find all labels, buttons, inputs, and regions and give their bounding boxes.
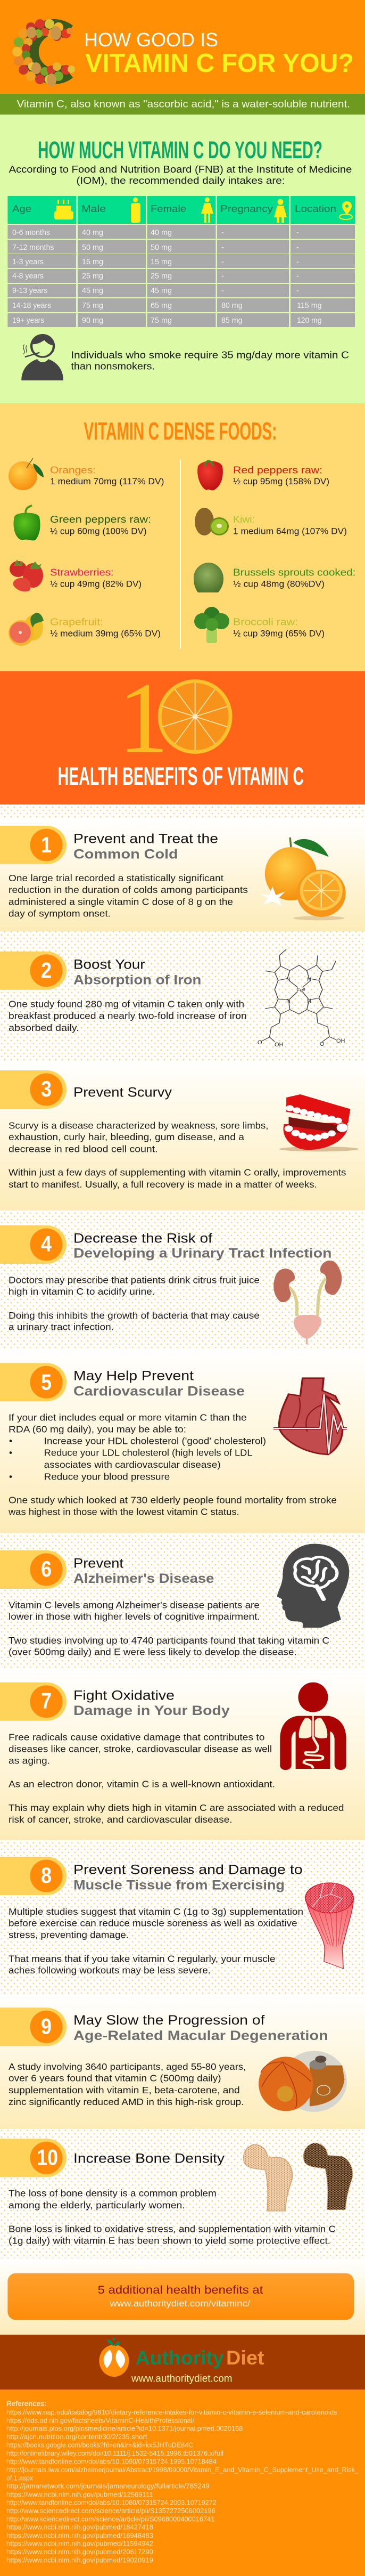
- food: green peppers: ½ cup 60mg (100% DV): [50, 526, 147, 536]
- icon: head with brain: [277, 1544, 349, 1628]
- icon: fruit letter C: [12, 19, 75, 86]
- number badge 8: 8: [41, 1863, 52, 1888]
- icon: red pepper: [197, 461, 223, 490]
- icon: smoker: [21, 335, 63, 380]
- benefit text: stress, preventing damage.: [9, 1930, 129, 1940]
- reference list: https://ods.od.nih.gov/factsheets/VitaminC-HealthProfessional/: [6, 2417, 195, 2424]
- benefit text: (over 500mg daily) and E were less likely to develop the disease.: [9, 1647, 297, 1657]
- panel: benefit 4: [0, 1210, 365, 1348]
- reference list: https://www.ncbi.nlm.nih.gov/pubmed/18427418: [6, 2524, 153, 2531]
- icon: strawberries: [10, 559, 43, 591]
- intake table: [7, 196, 355, 327]
- panel: benefit 6: [0, 1533, 365, 1669]
- row: 14-18 years: 65 mg: [151, 301, 172, 310]
- benefit title: Increase Bone Density: [73, 2151, 225, 2166]
- food: grapefruit: Grapefruit:: [50, 616, 103, 627]
- number badge 9: 9: [41, 2013, 52, 2038]
- icon: muscle fibre: [305, 1883, 353, 1969]
- benefit text: high in vitamin C to acidify urine.: [9, 1286, 155, 1297]
- reference list: http://onlinelibrary.wiley.com/doi/10.1111/j.1532-5415.1996.tb01376.x/full: [6, 2450, 223, 2457]
- row: 14-18 years: 80 mg: [221, 301, 243, 310]
- reference list: http://journals.plos.org/plosmedicine/article?id=10.1371/journal.pmed.0020168: [6, 2425, 243, 2433]
- callout: additional benefits: [7, 2273, 354, 2320]
- benefit text: absorbed daily.: [9, 1022, 79, 1033]
- smoker note: than nonsmokers.: [71, 361, 155, 371]
- food: red peppers: Red peppers raw:: [233, 465, 322, 475]
- benefit text: before exercise can reduce muscle soreness as well as oxidative: [9, 1918, 297, 1929]
- row: 9-13 years: -: [296, 286, 299, 295]
- benefit text: If your diet includes equal or more vitamin C than the: [9, 1412, 247, 1423]
- benefit text: [9, 1274, 260, 1332]
- benefit text: Multiple studies suggest that vitamin C (1g to 3g) supplementation: [9, 1906, 303, 1917]
- panel: how much vitamin C: [0, 115, 365, 403]
- benefit text: lower in those with higher levels of cognitive impairment.: [9, 1611, 260, 1622]
- icon: male: [131, 197, 140, 223]
- food: oranges: Oranges:: [50, 465, 96, 475]
- benefit title: Age-Related Macular Degeneration: [73, 2028, 328, 2043]
- reference list: https://www.ncbi.nlm.nih.gov/pubmed/19020919: [6, 2556, 153, 2564]
- benefit text: [9, 1599, 329, 1657]
- row: 7-12 months: [7, 240, 355, 254]
- row: 19+ years: 120 mg: [297, 316, 321, 325]
- benefit text: among the elderly, particularly women.: [9, 2200, 185, 2211]
- benefit title: [73, 1556, 214, 1586]
- food: strawberries: [10, 559, 142, 591]
- benefit text: zinc significantly reduced AMD in this high-risk group.: [9, 2096, 244, 2107]
- benefit text: •: [9, 1448, 12, 1458]
- icon: heme molecule: OH: [336, 1038, 345, 1044]
- benefit text: A study involving 3640 participants, aged 55-80 years,: [9, 2061, 246, 2072]
- number badge 2: 2: [41, 958, 52, 983]
- benefit text: The loss of bone density is a common problem: [9, 2188, 217, 2199]
- icon: broccoli: [194, 607, 229, 643]
- icon: eye with retina: [259, 2051, 347, 2112]
- row: 19+ years: 85 mg: [221, 316, 243, 325]
- food: grapefruit: ½ medium 39mg (65% DV): [50, 628, 161, 638]
- benefit text: Increase your HDL cholesterol ('good' cholesterol): [44, 1436, 266, 1447]
- benefit text: [9, 999, 247, 1033]
- benefit text: as aging.: [9, 1756, 50, 1766]
- panel: references: [0, 2390, 365, 2576]
- icon: orange: [9, 458, 44, 490]
- row: 4-8 years: 25 mg: [82, 272, 103, 280]
- benefit title: [73, 2013, 328, 2043]
- benefit text: administered a single vitamin C dose of 8 g on the: [9, 896, 233, 907]
- benefit title: [73, 832, 218, 862]
- benefit text: decrease in red blood cell count.: [9, 1143, 158, 1154]
- benefit text: Reduce your LDL cholesterol (high levels of LDL: [44, 1448, 253, 1458]
- row: 1-3 years: [7, 254, 355, 268]
- row: 7-12 months: 50 mg: [151, 243, 172, 252]
- table header row: Female: [151, 204, 186, 214]
- benefit text: [9, 1732, 344, 1825]
- panel: benefit 8: [0, 1840, 365, 1994]
- benefit text: [9, 1120, 346, 1190]
- row: 7-12 months: 7-12 months: [12, 243, 54, 252]
- benefit text: Bone loss is linked to oxidative stress, and supplementation with vitamin C: [9, 2223, 336, 2234]
- reference list: http://www.tandfonline.com/doi/abs/10.1080/07315724.2003.10719272: [6, 2499, 217, 2507]
- row: 0-6 months: 0-6 months: [12, 228, 50, 237]
- food: red peppers: ½ cup 95mg (158% DV): [233, 476, 329, 486]
- benefit text: One large trial recorded a statistically significant: [9, 873, 223, 883]
- benefit text: RDA (60 mg daily), you may be able to:: [9, 1424, 186, 1434]
- benefit title: Damage in Your Body: [73, 1703, 230, 1718]
- panel: benefit 9: [0, 1994, 365, 2129]
- benefit text: [8, 1412, 337, 1517]
- icon: heart with pulse: [273, 1378, 347, 1454]
- row: 9-13 years: 9-13 years: [12, 286, 47, 295]
- row: 9-13 years: [7, 284, 355, 297]
- row: 9-13 years: -: [221, 286, 224, 295]
- icon: cake: [54, 200, 73, 220]
- benefit text: One study which looked at 730 elderly people found mortality from stroke: [9, 1495, 337, 1506]
- panel: benefit 2: [0, 931, 365, 1061]
- smoker note: [71, 350, 349, 371]
- benefit text: (1g daily) with vitamin E has been shown to yield some protective effect.: [9, 2236, 330, 2246]
- row: 4-8 years: -: [296, 272, 299, 280]
- benefit title: May Help Prevent: [73, 1369, 194, 1384]
- reference list: http://ajcn.nutrition.org/content/30/2/235.short: [6, 2433, 147, 2441]
- row: 4-8 years: [7, 269, 355, 283]
- row: 19+ years: 19+ years: [12, 316, 44, 325]
- benefit title: [73, 1862, 303, 1893]
- table header row: Location: [295, 204, 336, 214]
- icon: heme molecule: N: [307, 977, 311, 983]
- row: 7-12 months: 50 mg: [82, 243, 103, 252]
- benefit text: Doctors may prescribe that patients drink citrus fruit juice: [9, 1274, 260, 1285]
- icon: heme molecule: Feᴵᴵ: [296, 987, 305, 994]
- panel: benefit 1: [0, 819, 365, 931]
- benefit text: This may explain why diets high in vitamin C are associated with a reduced: [9, 1802, 344, 1813]
- food: broccoli: Broccoli raw:: [233, 616, 298, 627]
- benefit title: Prevent Scurvy: [73, 1085, 172, 1100]
- numeral one: 1: [118, 662, 169, 774]
- benefit title: Muscle Tissue from Exercising: [73, 1878, 285, 1893]
- number badge 9: [0, 2008, 67, 2046]
- references heading: References:: [6, 2400, 47, 2408]
- benefit title: [73, 1231, 331, 1261]
- benefit title: Boost Your: [73, 957, 145, 972]
- panel: benefit 7: [0, 1669, 365, 1840]
- food: oranges: [9, 458, 164, 490]
- icon: heme molecule: [258, 949, 345, 1048]
- panel: benefit 3: [0, 1061, 365, 1210]
- smoker note: Individuals who smoke require 35 mg/day more vitamin C: [71, 350, 349, 361]
- food: brussels sprouts: ½ cup 48mg (80%DV): [233, 579, 325, 589]
- benefit text: a urinary tract infection.: [9, 1322, 114, 1332]
- row: 19+ years: [7, 313, 355, 327]
- benefit text: was highest in those with the lowest vitamin C status.: [8, 1506, 239, 1517]
- number badge 5: 5: [41, 1369, 52, 1394]
- reference list: http://jamanetwork.com/journals/jamaneurology/fullarticle/785249: [6, 2483, 210, 2490]
- benefit text: As an electron donor, vitamin C is a well-known antioxidant.: [9, 1778, 275, 1789]
- panel: call to action background: [0, 2258, 365, 2335]
- reference list: of.1.aspx: [6, 2474, 34, 2482]
- benefit title: Cardiovascular Disease: [73, 1384, 245, 1399]
- number badge 10: [0, 2139, 67, 2177]
- icon: heme molecule: OH: [275, 1042, 284, 1048]
- food: brussels sprouts: Brussels sprouts cooked:: [233, 567, 355, 578]
- benefit title: Prevent: [73, 1556, 123, 1571]
- intro text: According to Food and Nutrition Board (FNB) at the Institute of Medicine: [9, 164, 352, 175]
- icon: kidneys and bladder: [273, 1261, 342, 1344]
- number badge 10: 10: [37, 2144, 58, 2169]
- benefit text: Reduce your blood pressure: [44, 1471, 170, 1482]
- icon: green pepper: [14, 506, 40, 540]
- title line 1: HOW GOOD IS: [84, 29, 218, 51]
- reference list: https://www.ncbi.nlm.nih.gov/pubmed/16948483: [6, 2532, 153, 2539]
- benefit text: associates with cardiovascular disease): [44, 1459, 221, 1470]
- icon: female: [201, 197, 213, 223]
- number badge 2: [0, 952, 67, 990]
- number badge 3: [0, 1070, 67, 1109]
- reference list: https://books.google.com/books?hl=en&lr=&id=kx5JHTuDE84C: [6, 2442, 193, 2449]
- benefit text: [9, 2061, 246, 2107]
- row: 1-3 years: 15 mg: [151, 257, 172, 266]
- number badge 7: 7: [41, 1688, 52, 1713]
- reference list: https://www.nap.edu/catalog/9810/dietary-reference-intakes-for-vitamin-c-vitamin-e-selenium-and-carotenoids: [6, 2409, 337, 2416]
- row: 1-3 years: 15 mg: [82, 257, 103, 266]
- panel: footer logo: [0, 2335, 365, 2390]
- row: 14-18 years: 115 mg: [297, 301, 321, 310]
- row: 14-18 years: [7, 298, 355, 312]
- benefit title: Fight Oxidative: [73, 1688, 175, 1703]
- benefit text: [9, 2188, 336, 2246]
- reference list: http://journals.lww.com/alzheimerjournal/Abstract/1998/09000/Vitamin_E_and_Vitamin_C_Supplement_Use_and_Risk_: [6, 2466, 359, 2474]
- benefit text: Within just a few days of supplementing with vitamin C orally, improvements: [9, 1167, 346, 1178]
- row: 0-6 months: -: [296, 228, 299, 237]
- food: green peppers: [14, 506, 151, 540]
- logo wordmark: Authority: [136, 2347, 224, 2369]
- row: 4-8 years: 25 mg: [151, 272, 172, 280]
- table header row: Age: [12, 204, 31, 214]
- food: broccoli: [194, 607, 325, 643]
- row: 19+ years: 75 mg: [151, 316, 172, 325]
- icon: authority diet logo: [99, 2338, 129, 2377]
- row: 7-12 months: -: [221, 243, 224, 252]
- icon: orange slice zero: [158, 679, 233, 754]
- panel: definition band: [0, 94, 365, 115]
- row: 0-6 months: 40 mg: [82, 228, 103, 237]
- benefit text: exhaustion, curly hair, bleeding, gum disease, and a: [9, 1132, 244, 1142]
- number badge 6: [0, 1550, 67, 1589]
- row: 9-13 years: 45 mg: [151, 286, 172, 295]
- food: grapefruit: [9, 613, 161, 646]
- benefit text: That means that if you take vitamin C regularly, your muscle: [9, 1953, 276, 1964]
- benefit text: Free radicals cause oxidative damage that contributes to: [9, 1732, 264, 1743]
- food: kiwi: [195, 508, 347, 536]
- number badge 7: [0, 1683, 67, 1721]
- row: 14-18 years: 14-18 years: [12, 301, 51, 310]
- benefit title: [73, 1688, 230, 1718]
- number badge 8: [0, 1857, 67, 1895]
- reference list: https://www.ncbi.nlm.nih.gov/pubmed/20617290: [6, 2548, 153, 2556]
- benefit text: day of symptom onset.: [9, 908, 111, 919]
- number badge 5: [0, 1363, 67, 1401]
- benefit text: Two studies involving up to 4740 participants found that taking vitamin C: [9, 1635, 329, 1646]
- panel: benefit 10: [0, 2129, 365, 2258]
- benefit text: over 6 years found that vitamin C (500mg daily): [9, 2073, 221, 2084]
- panel: benefit 5: [0, 1348, 365, 1533]
- benefit title: Alzheimer's Disease: [73, 1571, 214, 1586]
- benefit title: Developing a Urinary Tract Infection: [73, 1246, 331, 1261]
- reference list: http://www.sciencedirect.com/science/article/pii/S1357272506002196: [6, 2507, 215, 2515]
- benefit title: Common Cold: [73, 847, 178, 862]
- icon: oranges: [260, 838, 346, 920]
- benefit text: [9, 873, 248, 919]
- table header row: Male: [81, 204, 106, 214]
- row: 4-8 years: -: [221, 272, 224, 280]
- benefit text: Scurvy is a disease characterized by weakness, sore limbs,: [9, 1120, 268, 1131]
- reference list: http://www.sciencedirect.com/science/article/pii/S0968000400016741: [6, 2515, 214, 2523]
- intro text: [9, 164, 352, 186]
- icon: location pin: [339, 201, 352, 220]
- food: kiwi: Kiwi:: [233, 514, 255, 525]
- icon: kiwi: [195, 508, 229, 535]
- food: kiwi: 1 medium 64mg (107% DV): [233, 526, 347, 536]
- reference list: https://www.ncbi.nlm.nih.gov/pubmed/11594942: [6, 2540, 153, 2548]
- benefit text: risk of cancer, stroke, and cardiovascular disease.: [9, 1814, 233, 1825]
- icon: heme molecule: N: [307, 998, 311, 1004]
- benefit title: [73, 1369, 245, 1399]
- row: 0-6 months: [7, 225, 355, 239]
- decorative dotted strip: [0, 805, 365, 819]
- callout: additional benefits: 5 additional health benefits at: [98, 2284, 263, 2296]
- number badge 4: [0, 1225, 67, 1264]
- row: 1-3 years: 1-3 years: [12, 257, 44, 266]
- benefit title: Absorption of Iron: [73, 972, 201, 987]
- row: 9-13 years: 45 mg: [82, 286, 103, 295]
- number badge 6: 6: [41, 1556, 52, 1581]
- row: 1-3 years: -: [221, 257, 224, 266]
- benefit text: aches following workouts may be less severe.: [9, 1965, 211, 1976]
- icon: grapefruit: [9, 613, 44, 646]
- table header row: [7, 196, 355, 224]
- benefit text: Vitamin C levels among Alzheimer's disease patients are: [9, 1599, 260, 1610]
- benefit text: breakfast produced a nearly two-fold increase of iron: [9, 1011, 247, 1021]
- benefit title: May Slow the Progression of: [73, 2013, 264, 2028]
- callout: additional benefits: www.authoritydiet.com/vitaminc/: [109, 2298, 250, 2309]
- title line 2: VITAMIN C FOR YOU?: [85, 49, 354, 78]
- table header row: Pregnancy: [220, 204, 273, 214]
- benefit title: [73, 957, 201, 987]
- benefit text: One study found 280 mg of vitamin C taken only with: [9, 999, 244, 1010]
- panel: header: [0, 0, 365, 94]
- benefit text: [9, 1906, 303, 1976]
- food: brussels sprouts: [194, 563, 355, 592]
- number badge 3: 3: [41, 1076, 52, 1101]
- number badge 1: [0, 826, 67, 864]
- icon: wind-up teeth: [279, 1094, 359, 1151]
- icon: heme molecule: O: [320, 1041, 325, 1047]
- benefit text: reduction in the duration of colds among participants: [9, 884, 248, 895]
- icon: healthy and osteoporotic bones: [244, 2143, 352, 2211]
- benefit text: •: [9, 1471, 12, 1482]
- benefit text: diseases like cancer, stroke, cardiovascular disease as well: [9, 1743, 272, 1754]
- row: 7-12 months: -: [296, 243, 299, 252]
- row: 19+ years: 90 mg: [82, 316, 103, 325]
- row: 1-3 years: -: [296, 257, 299, 266]
- panel: vitamin C dense foods: [0, 403, 365, 671]
- food: green peppers: Green peppers raw:: [50, 514, 151, 525]
- number badge 1: 1: [41, 832, 52, 857]
- benefit title: Prevent Soreness and Damage to: [73, 1862, 303, 1877]
- food: red peppers: [197, 461, 329, 490]
- icon: heme molecule: N: [286, 977, 291, 983]
- benefit text: •: [9, 1436, 12, 1447]
- row: 4-8 years: 4-8 years: [12, 272, 44, 280]
- row: 0-6 months: -: [221, 228, 224, 237]
- food: strawberries: Strawberries:: [50, 567, 114, 578]
- benefit title: Prevent and Treat the: [73, 832, 218, 847]
- benefit text: start to manifest. Usually, a full recovery is made in a matter of weeks.: [9, 1179, 317, 1190]
- row: 14-18 years: 75 mg: [82, 301, 103, 310]
- icon: heme molecule: O: [258, 1039, 262, 1046]
- intro text: (IOM), the recommended daily intakes are:: [77, 175, 285, 186]
- benefit title: Decrease the Risk of: [73, 1231, 212, 1246]
- panel: definition band: Vitamin C, also known as "ascorbic acid," is a water-soluble nutrient.: [17, 99, 350, 110]
- icon: body with organs: [280, 1683, 346, 1770]
- website address: www.authoritydiet.com: [131, 2374, 233, 2385]
- icon: brussels sprout: [194, 563, 223, 592]
- logo wordmark: Diet: [226, 2347, 264, 2369]
- icon: heme molecule: N: [286, 998, 291, 1004]
- number badge 4: 4: [41, 1231, 52, 1256]
- food: strawberries: ½ cup 49mg (82% DV): [50, 579, 142, 589]
- food: oranges: 1 medium 70mg (117% DV): [50, 476, 164, 486]
- reference list: [6, 2409, 359, 2564]
- reference list: https://www.ncbi.nlm.nih.gov/pubmed/12569111: [6, 2491, 153, 2498]
- benefit text: Doing this inhibits the growth of bacteria that may cause: [9, 1310, 260, 1321]
- row: 0-6 months: 40 mg: [151, 228, 172, 237]
- icon: pregnant woman: [274, 199, 287, 223]
- food: broccoli: ½ cup 39mg (65% DV): [233, 628, 325, 638]
- panel: health benefits banner: [0, 662, 365, 805]
- logo wordmark: [136, 2347, 264, 2369]
- reference list: http://www.tandfonline.com/doi/abs/10.1080/07315724.1995.10718484: [6, 2458, 217, 2465]
- benefit text: supplementation with vitamin E, beta-carotene, and: [9, 2085, 240, 2095]
